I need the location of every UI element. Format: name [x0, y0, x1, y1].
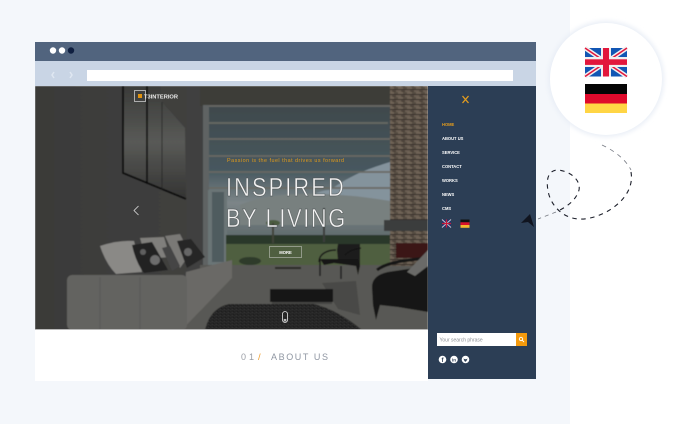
- slider previous arrow: [134, 206, 138, 215]
- dashed looping arrow: [521, 145, 631, 227]
- menu items: NEWS: [442, 192, 455, 197]
- social icons: [439, 356, 469, 364]
- more button: MORE: [279, 250, 292, 255]
- menu items: CONTACT: [442, 164, 462, 169]
- cushions: [100, 241, 142, 274]
- floor: [200, 265, 428, 330]
- fireplace armchair: [372, 266, 428, 320]
- center chair: [337, 244, 360, 267]
- search box: Your search phrase: [440, 338, 483, 344]
- menu items: ABOUT US: [442, 136, 464, 141]
- sidebar menu panel: [428, 86, 536, 379]
- arrow head: [521, 214, 534, 227]
- social icons: in: [452, 358, 456, 362]
- hero photo: living room: [35, 86, 428, 330]
- social icons: f: [442, 358, 444, 364]
- menu items: SERVICE: [442, 150, 460, 155]
- shaggy rug: [205, 304, 362, 330]
- hero headline: INSPIRED: [226, 173, 344, 202]
- UK flag: [585, 48, 627, 76]
- menu items: WORKS: [442, 178, 458, 183]
- wall mirror: [124, 104, 186, 198]
- about us strip: [35, 330, 428, 381]
- German flag: [585, 84, 627, 113]
- stone wall: [390, 86, 428, 266]
- language flags callout: [548, 21, 664, 137]
- browser title bar: [35, 42, 536, 61]
- hero tagline: Passion is the fuel that drives us forward: [227, 158, 344, 164]
- search box: [437, 333, 527, 346]
- more button: [270, 246, 302, 258]
- close icon: [462, 96, 468, 103]
- about us strip: 01: [241, 352, 254, 362]
- browser toolbar: [35, 61, 536, 86]
- sofa: [185, 260, 232, 324]
- hero headline: [226, 173, 345, 233]
- browser window: [35, 42, 536, 381]
- menu items: [442, 122, 464, 211]
- mouse scroll icon: [282, 312, 288, 322]
- hero headline: BY LIVING: [226, 204, 345, 233]
- about us strip: /: [258, 352, 261, 363]
- small UK flag: [442, 220, 451, 228]
- logo: [134, 90, 178, 102]
- menu items: CMS: [442, 206, 451, 211]
- menu items: HOME: [442, 122, 455, 127]
- small German flag: [460, 220, 470, 228]
- about us strip: ABOUT US: [271, 352, 328, 362]
- coffee table: [270, 289, 333, 302]
- logo: T3INTERIOR: [144, 94, 178, 100]
